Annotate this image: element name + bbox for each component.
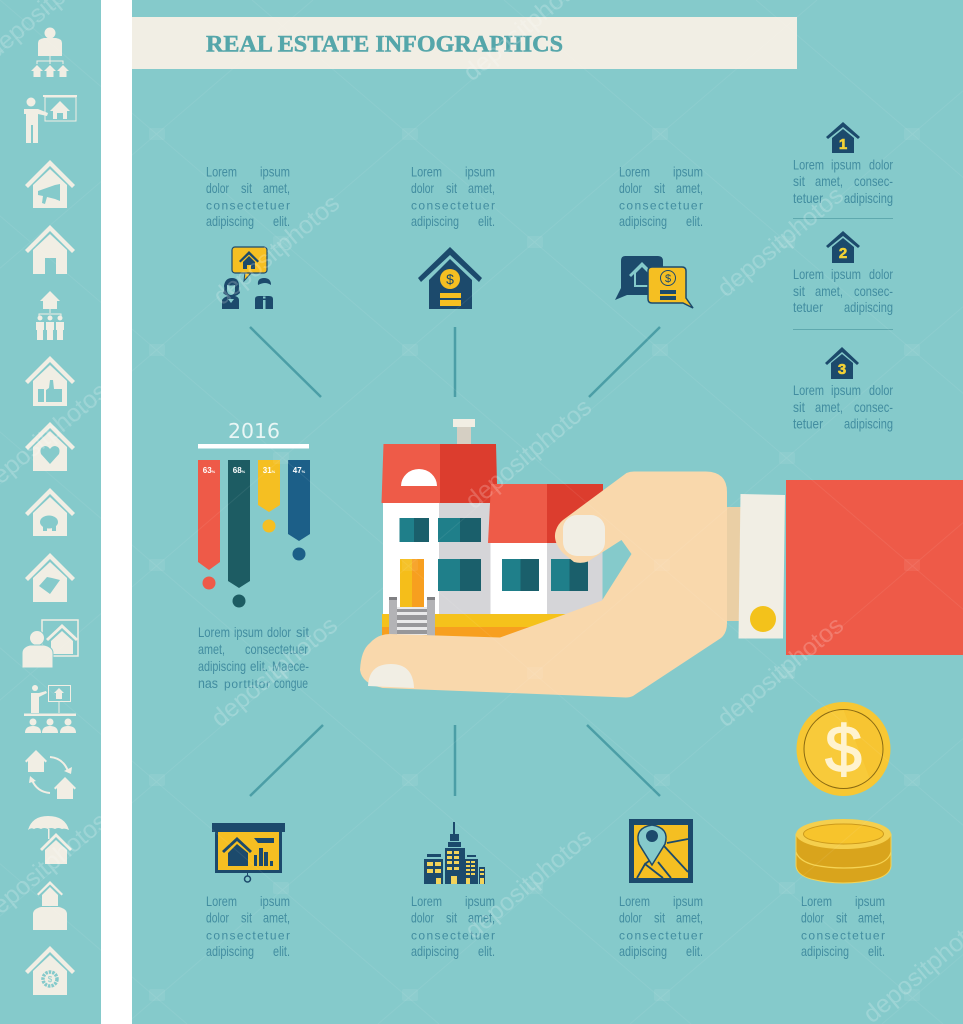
text: coins caption: Lorem <box>801 893 832 909</box>
icon: dollar coin: $ <box>825 712 862 786</box>
icon: dollar coin <box>796 702 890 796</box>
text: step 3 <box>793 382 893 432</box>
text: top right: amet, <box>676 180 703 196</box>
text: chart caption: Maece- <box>272 658 309 674</box>
text: step 3: adipiscing <box>844 416 893 432</box>
text: bottom left <box>206 893 290 959</box>
text: bottom centre <box>411 893 495 959</box>
sidebar icon: handshake house <box>25 553 75 602</box>
text: bottom right: sit <box>654 910 665 926</box>
text: top centre: Lorem <box>411 164 442 180</box>
text: top left <box>206 164 290 229</box>
connector lines <box>250 327 660 796</box>
text: bottom right: amet, <box>676 910 703 926</box>
text: coins caption <box>801 893 885 959</box>
sidebar icon: megaphone house <box>25 160 75 208</box>
bar chart: 2016: 2016 <box>228 419 280 443</box>
text: step 1: tetuer <box>793 190 823 206</box>
text: top left: consectetuer <box>206 198 290 212</box>
numbered house 2 <box>826 231 860 263</box>
text: top centre: ipsum <box>465 164 495 180</box>
sidebar icon: agent house <box>33 881 67 930</box>
text: coins caption: dolor <box>801 910 824 926</box>
sidebar icon: cycling houses <box>25 750 76 799</box>
text: bottom centre: adipiscing <box>411 943 459 959</box>
watermarks: depositphotos <box>712 611 849 733</box>
text: top left: sit <box>241 180 252 196</box>
text: step 1: adipiscing <box>844 190 893 206</box>
sidebar icon: house with team <box>36 291 64 340</box>
icon: house with dollar coin: $ <box>446 271 454 287</box>
text: coins caption: sit <box>836 910 847 926</box>
icon: city buildings <box>424 822 485 884</box>
watermark camera marks <box>149 128 920 1001</box>
text: step 2: amet, <box>815 283 843 299</box>
text: top left: Lorem <box>206 164 237 180</box>
text: step 3: amet, <box>815 399 843 415</box>
text: step 2 <box>793 266 893 315</box>
sidebar icon: plain house <box>25 225 75 274</box>
text: chart caption: porttitor <box>224 677 270 691</box>
text: step 2: adipiscing <box>844 299 893 315</box>
text: chart caption: nas <box>198 675 218 691</box>
sidebar icon: seminar <box>24 685 76 733</box>
text: chart caption: ipsum <box>234 624 263 640</box>
numbered house 1: 1 <box>839 136 847 153</box>
numbered house 3 <box>825 347 859 379</box>
watermarks: depositphotos <box>206 611 343 733</box>
text: bottom left: amet, <box>263 910 290 926</box>
text: top right: adipiscing <box>619 213 667 229</box>
bar chart: 2016: 31% <box>263 466 276 475</box>
text: step 3: tetuer <box>793 416 823 432</box>
sidebar icon: presenter with board <box>24 95 77 143</box>
text: top centre: dolor <box>411 180 434 196</box>
text: step 2: consec- <box>854 283 893 299</box>
text: top centre: elit. <box>478 213 495 229</box>
icon: house with dollar coin <box>418 247 482 309</box>
numbered house 2: 2 <box>839 245 847 262</box>
text: top left: adipiscing <box>206 213 254 229</box>
watermarks: depositphotos <box>460 823 597 945</box>
text: step 2: Lorem <box>793 266 824 282</box>
text: bottom centre: amet, <box>468 910 495 926</box>
text: step 1: amet, <box>815 173 843 189</box>
icon: coin stack <box>796 819 891 883</box>
text: top right: dolor <box>619 180 642 196</box>
text: top right: elit. <box>686 213 703 229</box>
icon: price chat bubbles: $ <box>665 273 671 285</box>
bar chart: 2016: 68% <box>233 466 246 475</box>
text: bottom left: adipiscing <box>206 943 254 959</box>
numbered house 1 <box>826 122 860 153</box>
sidebar icon: gear dollar house <box>25 946 75 995</box>
text: top right: consectetuer <box>619 198 703 212</box>
text: top right: Lorem <box>619 164 650 180</box>
title banner: REAL ESTATE INFOGRAPHICS <box>206 32 563 56</box>
text: step 3: consec- <box>854 399 893 415</box>
text: chart caption: Lorem <box>198 624 230 640</box>
text: bottom left: sit <box>241 910 252 926</box>
text: coins caption: consectetuer <box>801 928 885 942</box>
sidebar icon: piggy bank house <box>25 488 75 536</box>
text: chart caption: amet, <box>198 641 225 657</box>
text: coins caption: elit. <box>868 943 885 959</box>
text: step 1: Lorem <box>793 156 824 172</box>
text: bottom centre: sit <box>446 910 457 926</box>
sidebar icon: heart house <box>25 422 75 471</box>
text: coins caption: amet, <box>858 910 885 926</box>
text: bottom left: ipsum <box>260 893 290 909</box>
text: step 1: ipsum <box>831 156 861 172</box>
text: top centre: adipiscing <box>411 213 459 229</box>
icon: map with pin <box>629 819 693 883</box>
text: top left: ipsum <box>260 164 290 180</box>
text: step 1: dolor <box>869 156 893 172</box>
house on hand <box>382 419 603 638</box>
text: chart caption: congue <box>274 675 308 691</box>
bar chart: 2016 <box>198 419 310 608</box>
text: bottom centre: elit. <box>478 943 495 959</box>
sidebar icon: gear dollar house: $ <box>48 975 53 984</box>
text: step 2: dolor <box>869 266 893 282</box>
text: step 1: consec- <box>854 173 893 189</box>
text: coins caption: adipiscing <box>801 943 849 959</box>
text: top right <box>619 164 703 229</box>
text: chart caption: sit <box>296 624 309 640</box>
text: chart caption: adipiscing <box>198 658 246 674</box>
text: step 2: sit <box>793 283 805 299</box>
watermarks: depositphotos <box>712 181 849 303</box>
text: bottom left: elit. <box>273 943 290 959</box>
text: bottom right <box>619 893 703 959</box>
text: top centre: sit <box>446 180 457 196</box>
text: top left: dolor <box>206 180 229 196</box>
text: chart caption: consectetuer <box>245 641 308 657</box>
text: top centre <box>411 164 495 229</box>
text: step 3: sit <box>793 399 805 415</box>
text: step 3: dolor <box>869 382 893 398</box>
text: chart caption: elit. <box>250 658 268 674</box>
watermarks: depositphotos <box>460 393 597 515</box>
text: coins caption: ipsum <box>855 893 885 909</box>
numbered house 3: 3 <box>838 361 846 378</box>
text: bottom centre: consectetuer <box>411 928 495 942</box>
text: top centre: amet, <box>468 180 495 196</box>
text: step 2: ipsum <box>831 266 861 282</box>
text: bottom right: adipiscing <box>619 943 667 959</box>
text: step 3: ipsum <box>831 382 861 398</box>
text: bottom right: dolor <box>619 910 642 926</box>
text: bottom right: consectetuer <box>619 928 703 942</box>
sidebar icon: umbrella house <box>28 816 72 864</box>
text: chart caption <box>198 624 309 691</box>
text: top right: sit <box>654 180 665 196</box>
text: step 3: Lorem <box>793 382 824 398</box>
sidebar icon: manager with houses <box>31 28 69 77</box>
text: bottom centre: dolor <box>411 910 434 926</box>
text: bottom left: consectetuer <box>206 928 290 942</box>
bar chart: 2016: 63% <box>203 466 216 475</box>
text: top right: ipsum <box>673 164 703 180</box>
text: bottom right: elit. <box>686 943 703 959</box>
icon: presentation board <box>212 823 285 882</box>
bar chart: 2016: 47% <box>293 466 306 475</box>
text: step 2: tetuer <box>793 299 823 315</box>
text: step 1: sit <box>793 173 805 189</box>
text: top left: elit. <box>273 213 290 229</box>
text: bottom right: Lorem <box>619 893 650 909</box>
text: bottom right: ipsum <box>673 893 703 909</box>
text: bottom centre: Lorem <box>411 893 442 909</box>
text: bottom left: Lorem <box>206 893 237 909</box>
sidebar icon: thumbs up house <box>25 356 75 406</box>
watermarks: depositphotos <box>208 189 345 311</box>
text: bottom centre: ipsum <box>465 893 495 909</box>
icon: price chat bubbles <box>615 256 693 308</box>
sidebar icon: agent with house frame <box>22 620 78 668</box>
text: bottom left: dolor <box>206 910 229 926</box>
text: top centre: consectetuer <box>411 198 495 212</box>
text: step 1 <box>793 156 893 206</box>
text: top left: amet, <box>263 180 290 196</box>
text: chart caption: dolor <box>267 624 291 640</box>
title banner <box>132 17 797 69</box>
icon: agents with speech bubble <box>222 247 273 309</box>
hand <box>360 472 963 698</box>
